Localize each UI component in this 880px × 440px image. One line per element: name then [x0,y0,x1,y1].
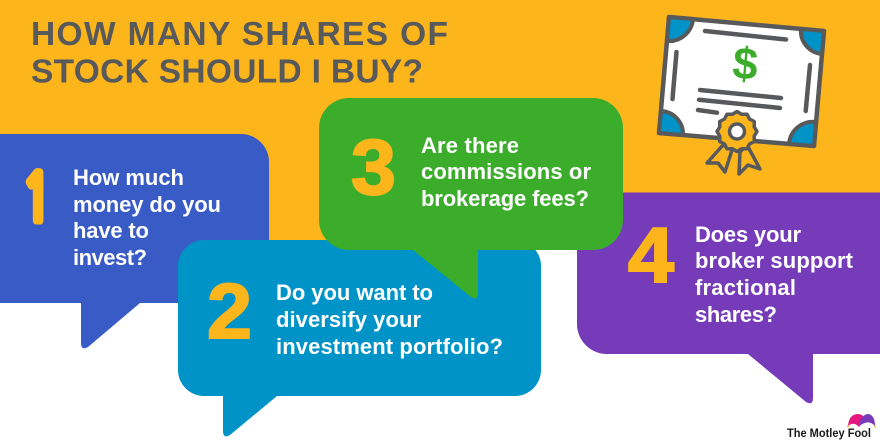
ribbon tails [707,145,760,174]
panel: question 2 [178,240,541,436]
wordmark: The Motley Fool [787,428,871,440]
jester hat [847,414,876,428]
question text: brokerage fees? [421,186,589,211]
question text: invest? [73,245,147,270]
yellow background [0,0,880,240]
question text: Does your [695,222,801,247]
number 1: 1 [22,166,52,231]
purple speech bubble [577,192,880,403]
certificate lines [672,31,810,113]
blue corners [659,17,824,146]
title: STOCK SHOULD I BUY? [31,54,423,90]
question text: money do you [73,192,221,217]
panel: question 1 [0,134,269,348]
question text: Do you want to [276,280,433,305]
question text: have to [73,218,149,243]
question text: Are there [421,133,519,158]
title [31,16,448,90]
question text: fractional [695,275,796,300]
blue speech bubble [0,134,269,348]
logo: The Motley Fool [787,414,876,440]
green speech bubble [319,98,623,298]
panel: question 4 [577,192,880,403]
question text [421,133,591,211]
question text: broker support [695,248,854,273]
number 4: 4 [628,211,674,299]
number 2: 2 [207,267,252,355]
question text [73,165,221,270]
panel: question 3 [319,98,623,298]
question text [276,280,503,359]
question text [695,222,854,327]
icon: stock certificate [659,17,824,174]
question text: How much [73,165,184,190]
question text: diversify your [276,307,421,332]
question text: commissions or [421,159,591,184]
number 3: 3 [351,123,396,211]
teal speech bubble [178,240,541,436]
question text: investment portfolio? [276,334,503,359]
dollar sign: $ [731,37,760,90]
rosette [717,112,757,152]
question text: shares? [695,302,777,327]
certificate sheet [659,17,824,146]
title: HOW MANY SHARES OF [31,16,448,53]
